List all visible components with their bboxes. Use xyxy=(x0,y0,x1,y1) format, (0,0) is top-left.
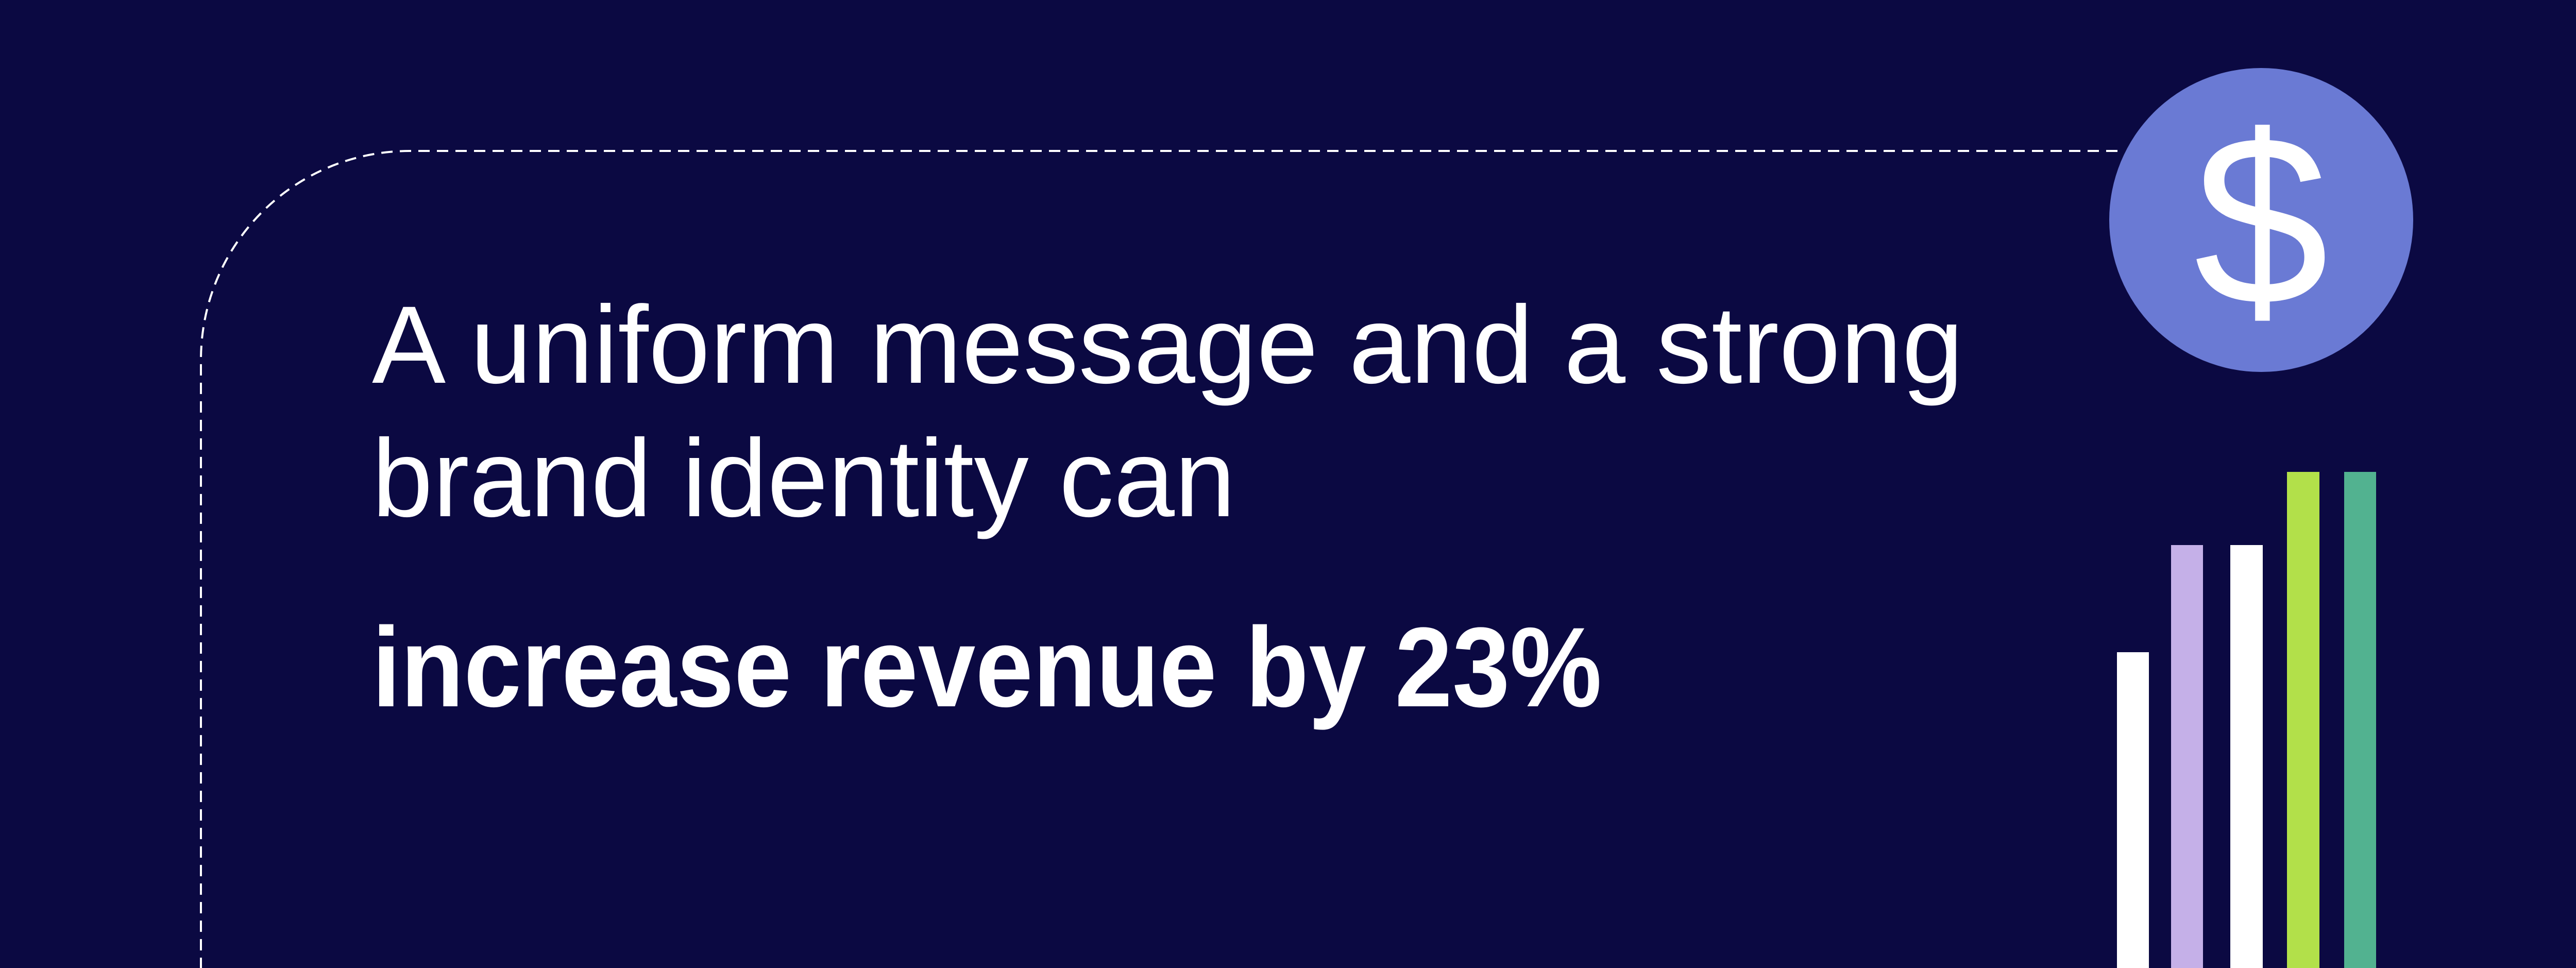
dashed frame xyxy=(201,151,2117,968)
headline text xyxy=(372,283,1963,731)
headline text: A uniform message and a strong xyxy=(372,283,1963,406)
icon: dollar coin xyxy=(2109,68,2413,372)
highlighted statistic: increase revenue by 23% xyxy=(372,604,1602,731)
bar chart xyxy=(2117,472,2376,968)
headline text: brand identity can xyxy=(372,417,1235,540)
icon: dollar coin: $ xyxy=(2194,85,2329,355)
